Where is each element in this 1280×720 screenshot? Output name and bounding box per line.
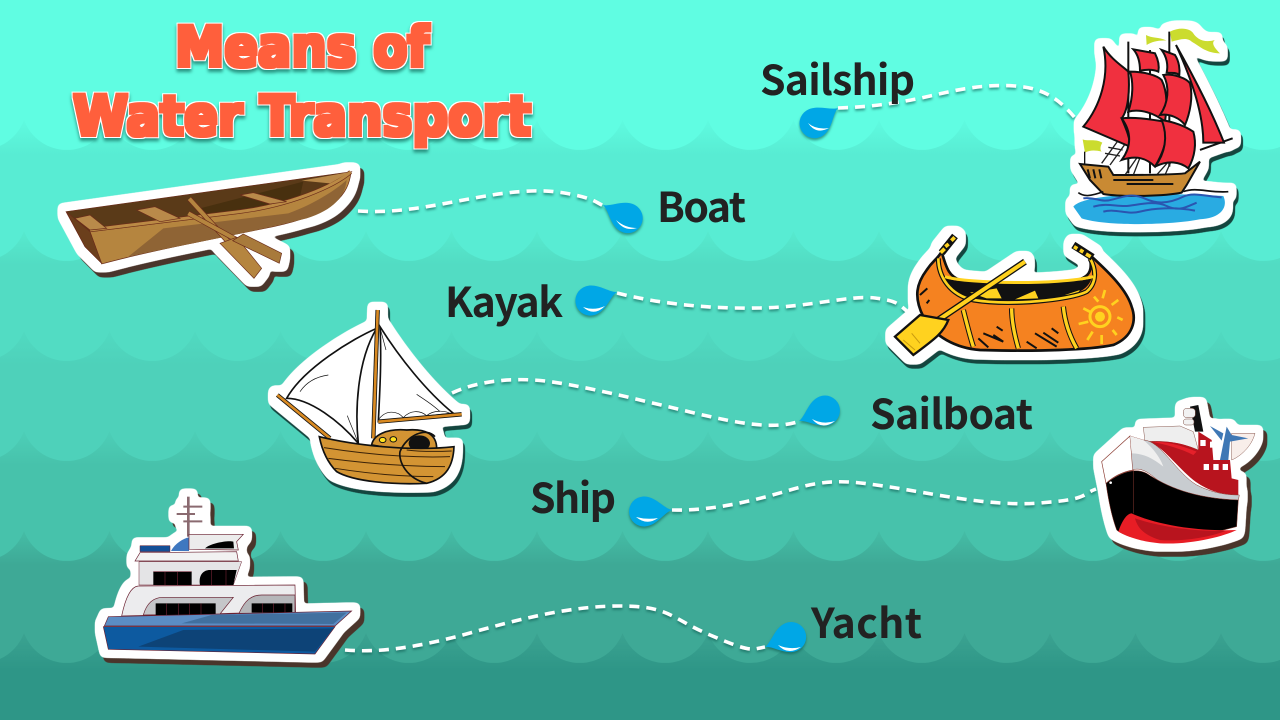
dashed connector: boat	[358, 191, 604, 212]
icon: kayak	[895, 236, 1134, 355]
icon: boat	[66, 172, 352, 278]
label: Kayak: Kayak	[445, 269, 563, 329]
title: Water Transport	[73, 84, 531, 148]
drop: sailboat	[793, 391, 844, 435]
drop: sailship	[794, 95, 846, 144]
title: Means of	[175, 15, 430, 79]
icon: sailship	[1073, 29, 1233, 224]
label: Yacht: Yacht	[810, 590, 922, 650]
label: Ship: Ship	[530, 465, 616, 525]
drop: boat	[596, 192, 648, 238]
icon: ship	[1102, 405, 1255, 544]
dashed connector: sailship	[838, 86, 1076, 119]
dashed connector: ship	[672, 482, 1096, 510]
label: Sailship: Sailship	[760, 47, 915, 107]
dashed connector: yacht	[345, 606, 765, 651]
drop: ship	[628, 495, 673, 527]
drop: yacht	[760, 618, 811, 661]
icon: yacht	[103, 497, 352, 654]
title	[73, 15, 531, 148]
dashed connector: sailboat	[452, 380, 800, 425]
icon: sailboat	[277, 310, 462, 484]
label: Boat: Boat	[657, 174, 746, 234]
dashed connector: kayak	[617, 293, 908, 312]
label: Sailboat: Sailboat	[870, 381, 1033, 441]
drop: kayak	[571, 278, 622, 320]
